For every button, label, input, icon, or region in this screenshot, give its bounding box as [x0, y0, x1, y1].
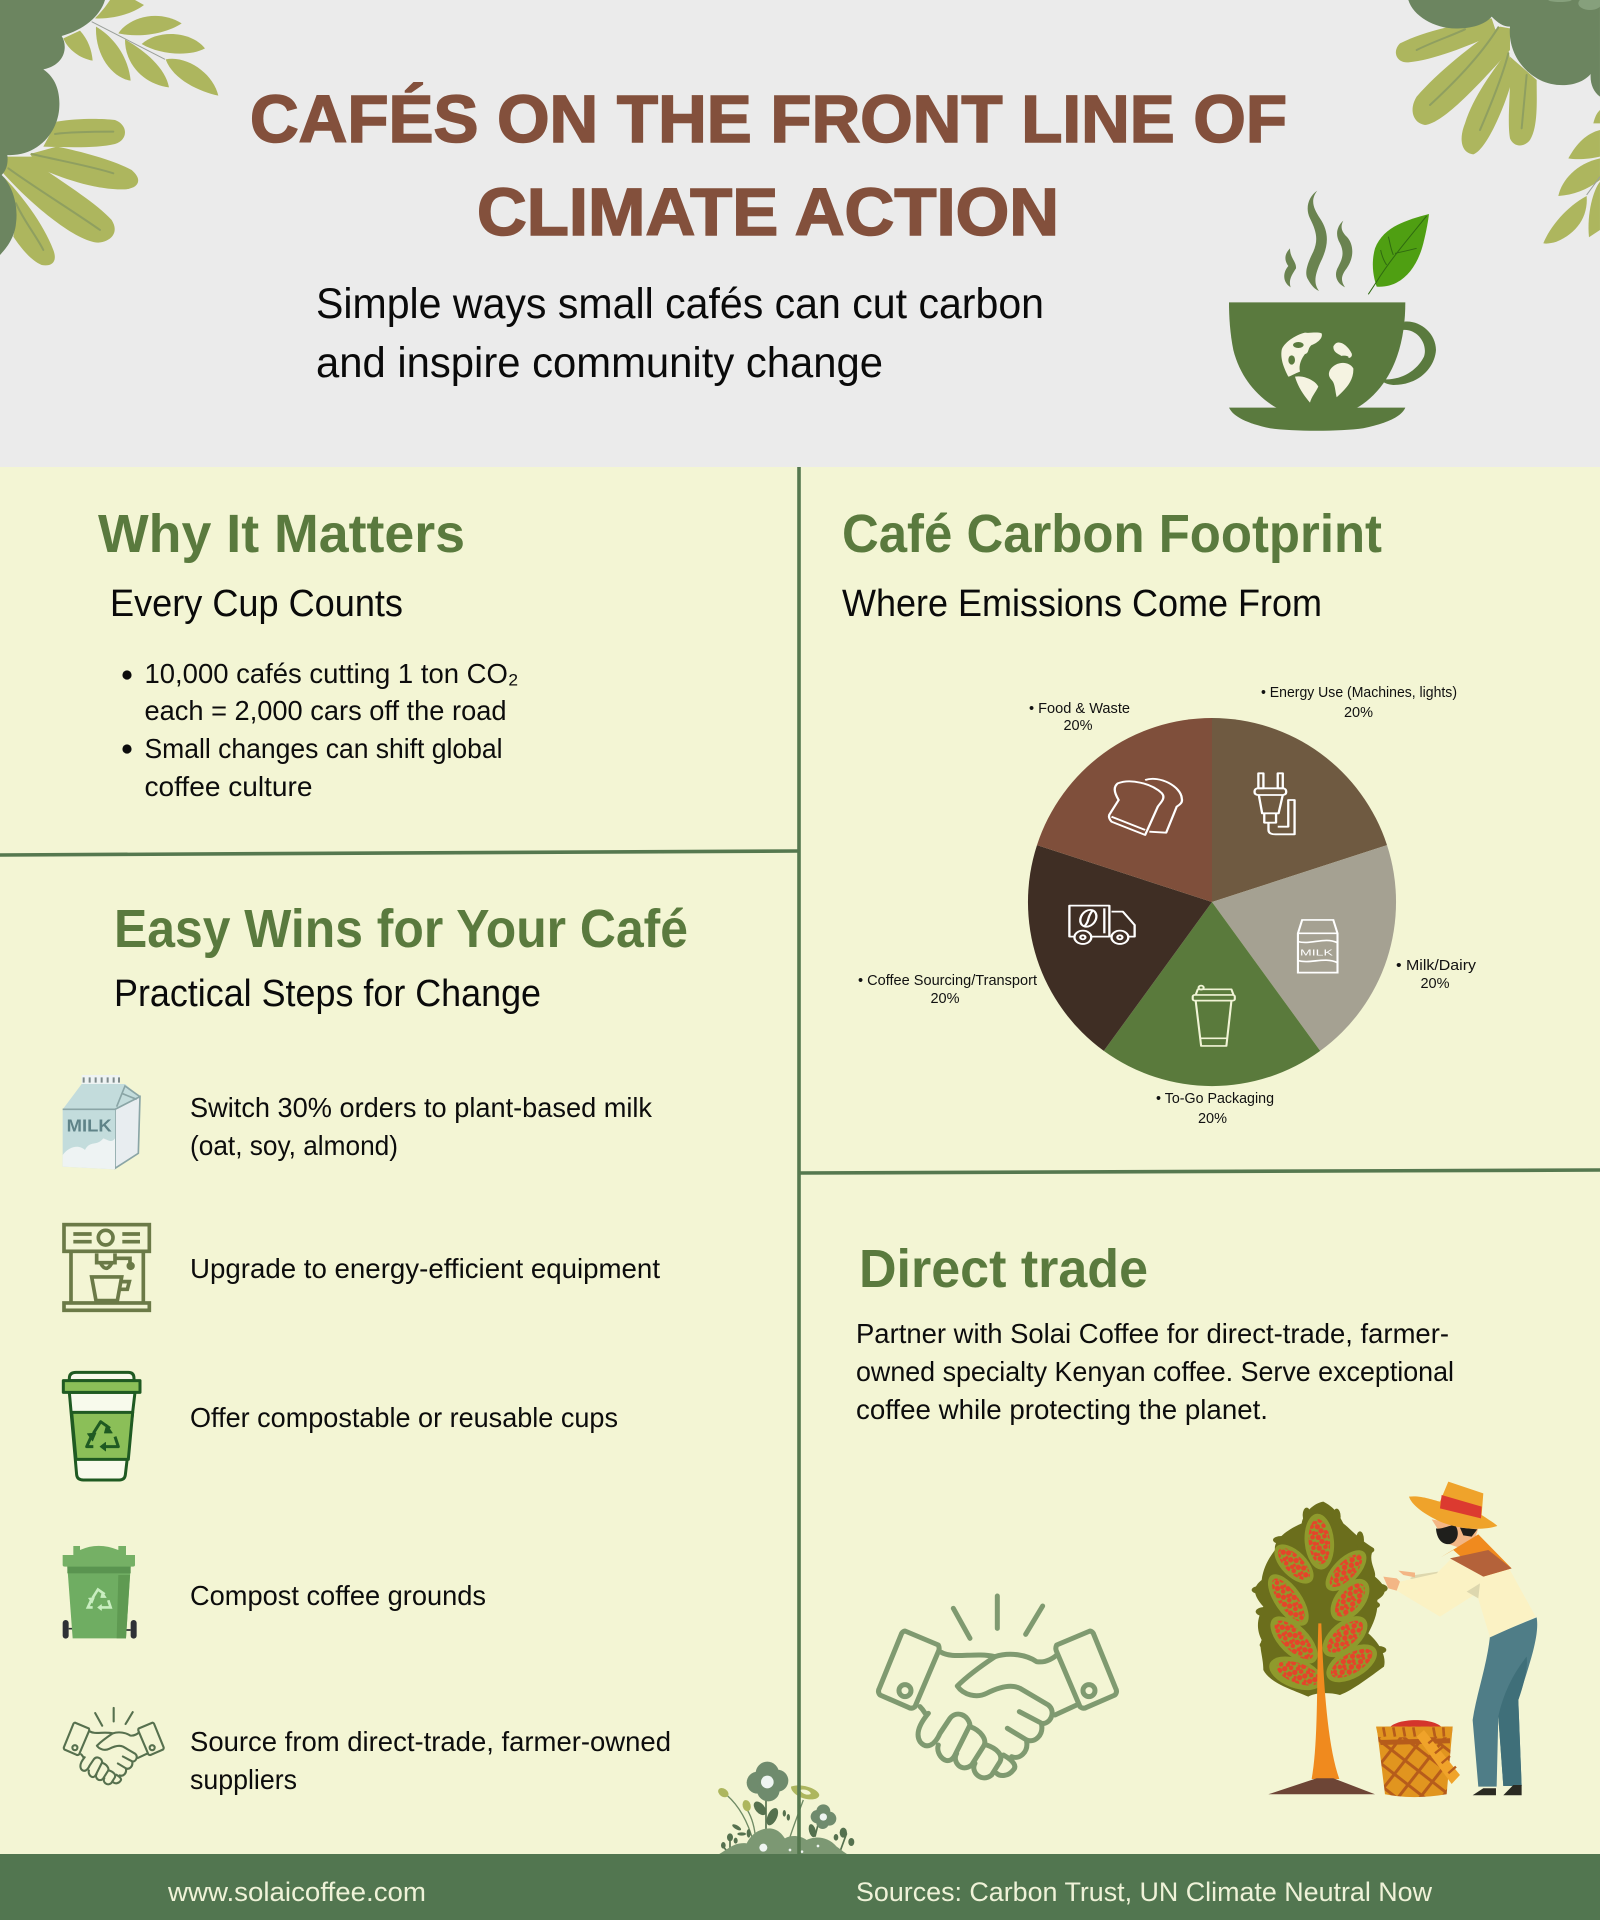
text: plant-based milk: (oat, soy, almond) [190, 1130, 398, 1161]
pie label: food and waste [1029, 701, 1130, 734]
subheading: every cup counts: Every Cup Counts [110, 583, 403, 625]
pie label: food and waste: • Food & Waste [1029, 701, 1130, 717]
panel: easy wins [0, 855, 799, 1854]
heading: carbon footprint: Café Carbon Footprint [842, 504, 1382, 564]
footer [0, 1854, 1600, 1920]
pie label: milk and dairy [1396, 958, 1477, 992]
divider: right horizontal [799, 1170, 1600, 1173]
text: plant-based milk: Switch 30% orders to plant-based milk [190, 1092, 653, 1123]
text: direct-trade suppliers [190, 1726, 671, 1795]
body text: owned specialty Kenyan coffee. Serve exceptional [856, 1356, 1454, 1387]
pie label: energy use [1261, 685, 1457, 721]
icon: espresso machine [64, 1225, 149, 1310]
pie label: energy use: 20% [1344, 705, 1373, 721]
divider: left horizontal [0, 851, 799, 855]
title [250, 82, 1287, 250]
text: equipment: Upgrade to energy-efficient equipment [190, 1253, 660, 1284]
subtitle: Simple ways small cafés can cut carbon [316, 280, 1044, 328]
subtitle [316, 280, 1044, 387]
pie label: energy use: • Energy Use (Machines, lights) [1261, 685, 1457, 701]
divider: vertical [797, 467, 801, 1854]
icon: to-go cup [1193, 986, 1235, 1046]
icon: milk: MILK [1300, 949, 1333, 957]
icon: coffee cup with globe and leaf [1229, 191, 1436, 431]
icon: milk carton: MILK [67, 1116, 112, 1136]
icon: handshake small [64, 1708, 164, 1784]
panel: why it matters [0, 467, 799, 853]
pie label: coffee sourcing: 20% [930, 991, 960, 1007]
icon: plug [1255, 773, 1295, 834]
body text: coffee while protecting the planet. [856, 1394, 1268, 1425]
foliage: top right [1396, 0, 1600, 244]
text: cups: Offer compostable or reusable cups [190, 1402, 618, 1433]
panel: direct trade [801, 1172, 1600, 1854]
panel: carbon footprint [801, 467, 1600, 1170]
bullet list: coffee culture [144, 771, 312, 802]
subheading: practical steps: Practical Steps for Change [114, 973, 541, 1015]
icon: bread [1109, 779, 1182, 835]
bullet list [122, 658, 519, 802]
icon: reusable cup [63, 1372, 140, 1480]
icon: handshake large [878, 1596, 1116, 1778]
pie chart [1028, 718, 1396, 1086]
icon: compost bin [63, 1546, 137, 1639]
icon: milk [1298, 920, 1338, 973]
icon: coffee truck [1069, 906, 1135, 944]
pie label: food and waste: 20% [1063, 718, 1093, 734]
body text [856, 1318, 1454, 1425]
pie label: to-go packaging [1156, 1091, 1274, 1127]
foliage: top left [0, 0, 218, 265]
footer: sources: Sources: Carbon Trust, UN Climate Neutral Now [856, 1877, 1432, 1907]
panel: header [0, 0, 1600, 467]
illustration: flowers at divider [716, 1762, 854, 1855]
heading: why it matters: Why It Matters [98, 504, 465, 564]
heading: easy wins: Easy Wins for Your Café [114, 899, 688, 959]
pie label: milk and dairy: 20% [1420, 976, 1450, 992]
bullet list: Small changes can shift global [144, 733, 502, 764]
subtitle: and inspire community change [316, 339, 883, 387]
pie label: to-go packaging: • To-Go Packaging [1156, 1091, 1274, 1107]
pie label: to-go packaging: 20% [1198, 1111, 1227, 1127]
illustration: coffee tree [1252, 1502, 1388, 1794]
footer: website: www.solaicoffee.com [167, 1877, 426, 1907]
title: CLIMATE ACTION [477, 175, 1059, 250]
pie label: coffee sourcing [858, 973, 1037, 1007]
text: direct-trade suppliers: Source from direct-trade, farmer-owned [190, 1726, 671, 1757]
illustration: basket of cherries [1376, 1720, 1460, 1797]
icon: milk carton [63, 1075, 140, 1169]
bullet list: each = 2,000 cars off the road [144, 695, 506, 726]
subheading: emissions: Where Emissions Come From [842, 583, 1322, 625]
title: CAFÉS ON THE FRONT LINE OF [250, 82, 1287, 157]
pie label: coffee sourcing: • Coffee Sourcing/Transport [858, 973, 1037, 989]
body text: Partner with Solai Coffee for direct-trade, farmer- [856, 1318, 1449, 1349]
text: direct-trade suppliers: suppliers [190, 1764, 297, 1795]
heading: direct trade: Direct trade [859, 1239, 1148, 1299]
text: compost: Compost coffee grounds [190, 1580, 486, 1611]
illustration: farmer [1383, 1482, 1537, 1795]
text: plant-based milk [190, 1092, 653, 1161]
bullet list: 10,000 cafés cutting 1 ton CO₂ [144, 658, 518, 689]
pie label: milk and dairy: • Milk/Dairy [1396, 958, 1477, 974]
